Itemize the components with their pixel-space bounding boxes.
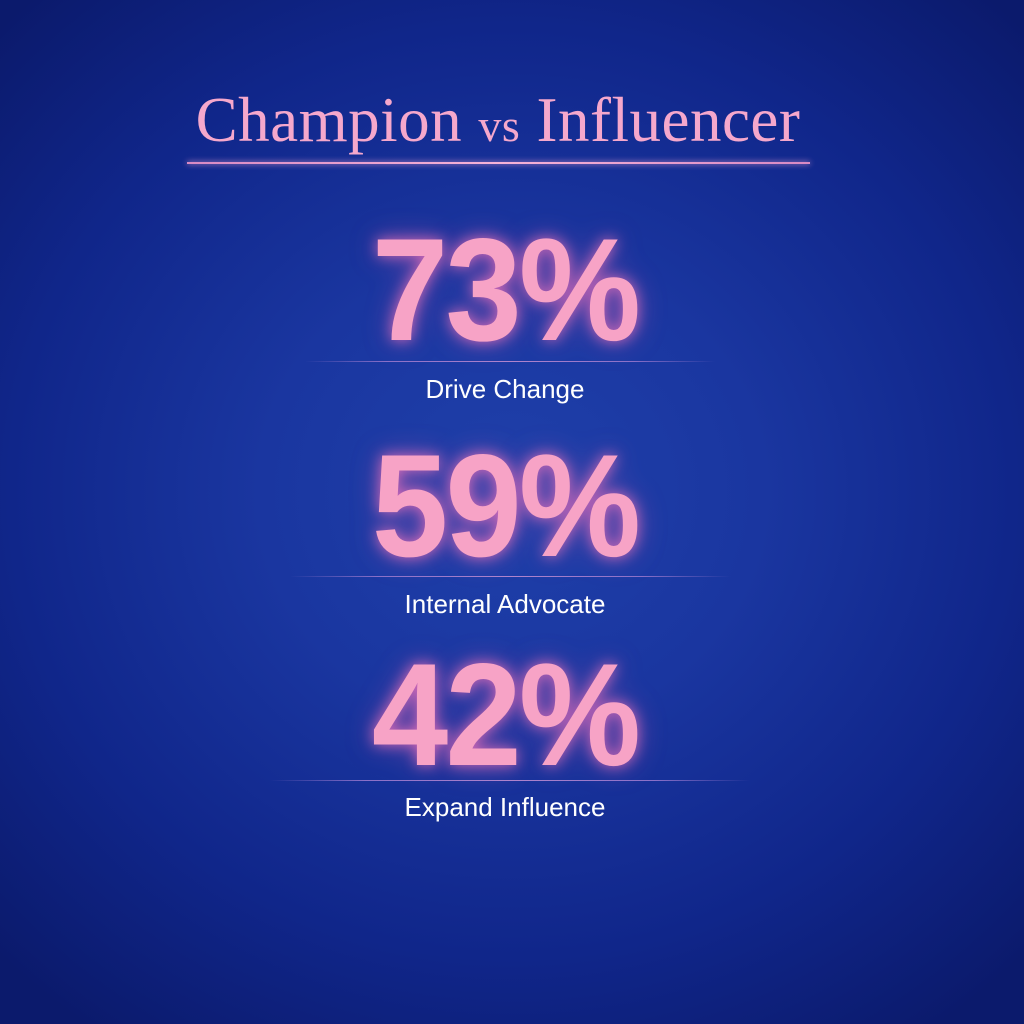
label: expand influence: Expand Influence	[405, 792, 605, 822]
label: internal advocate: Internal Advocate	[405, 589, 605, 619]
title underline	[187, 162, 810, 164]
stat: 73%: 73%	[372, 208, 638, 371]
stat: 42%: 42%	[372, 633, 638, 796]
label: drive change: Drive Change	[426, 374, 584, 404]
title: Champion vs Influencer	[196, 85, 800, 155]
stat: 59%: 59%	[372, 424, 638, 587]
